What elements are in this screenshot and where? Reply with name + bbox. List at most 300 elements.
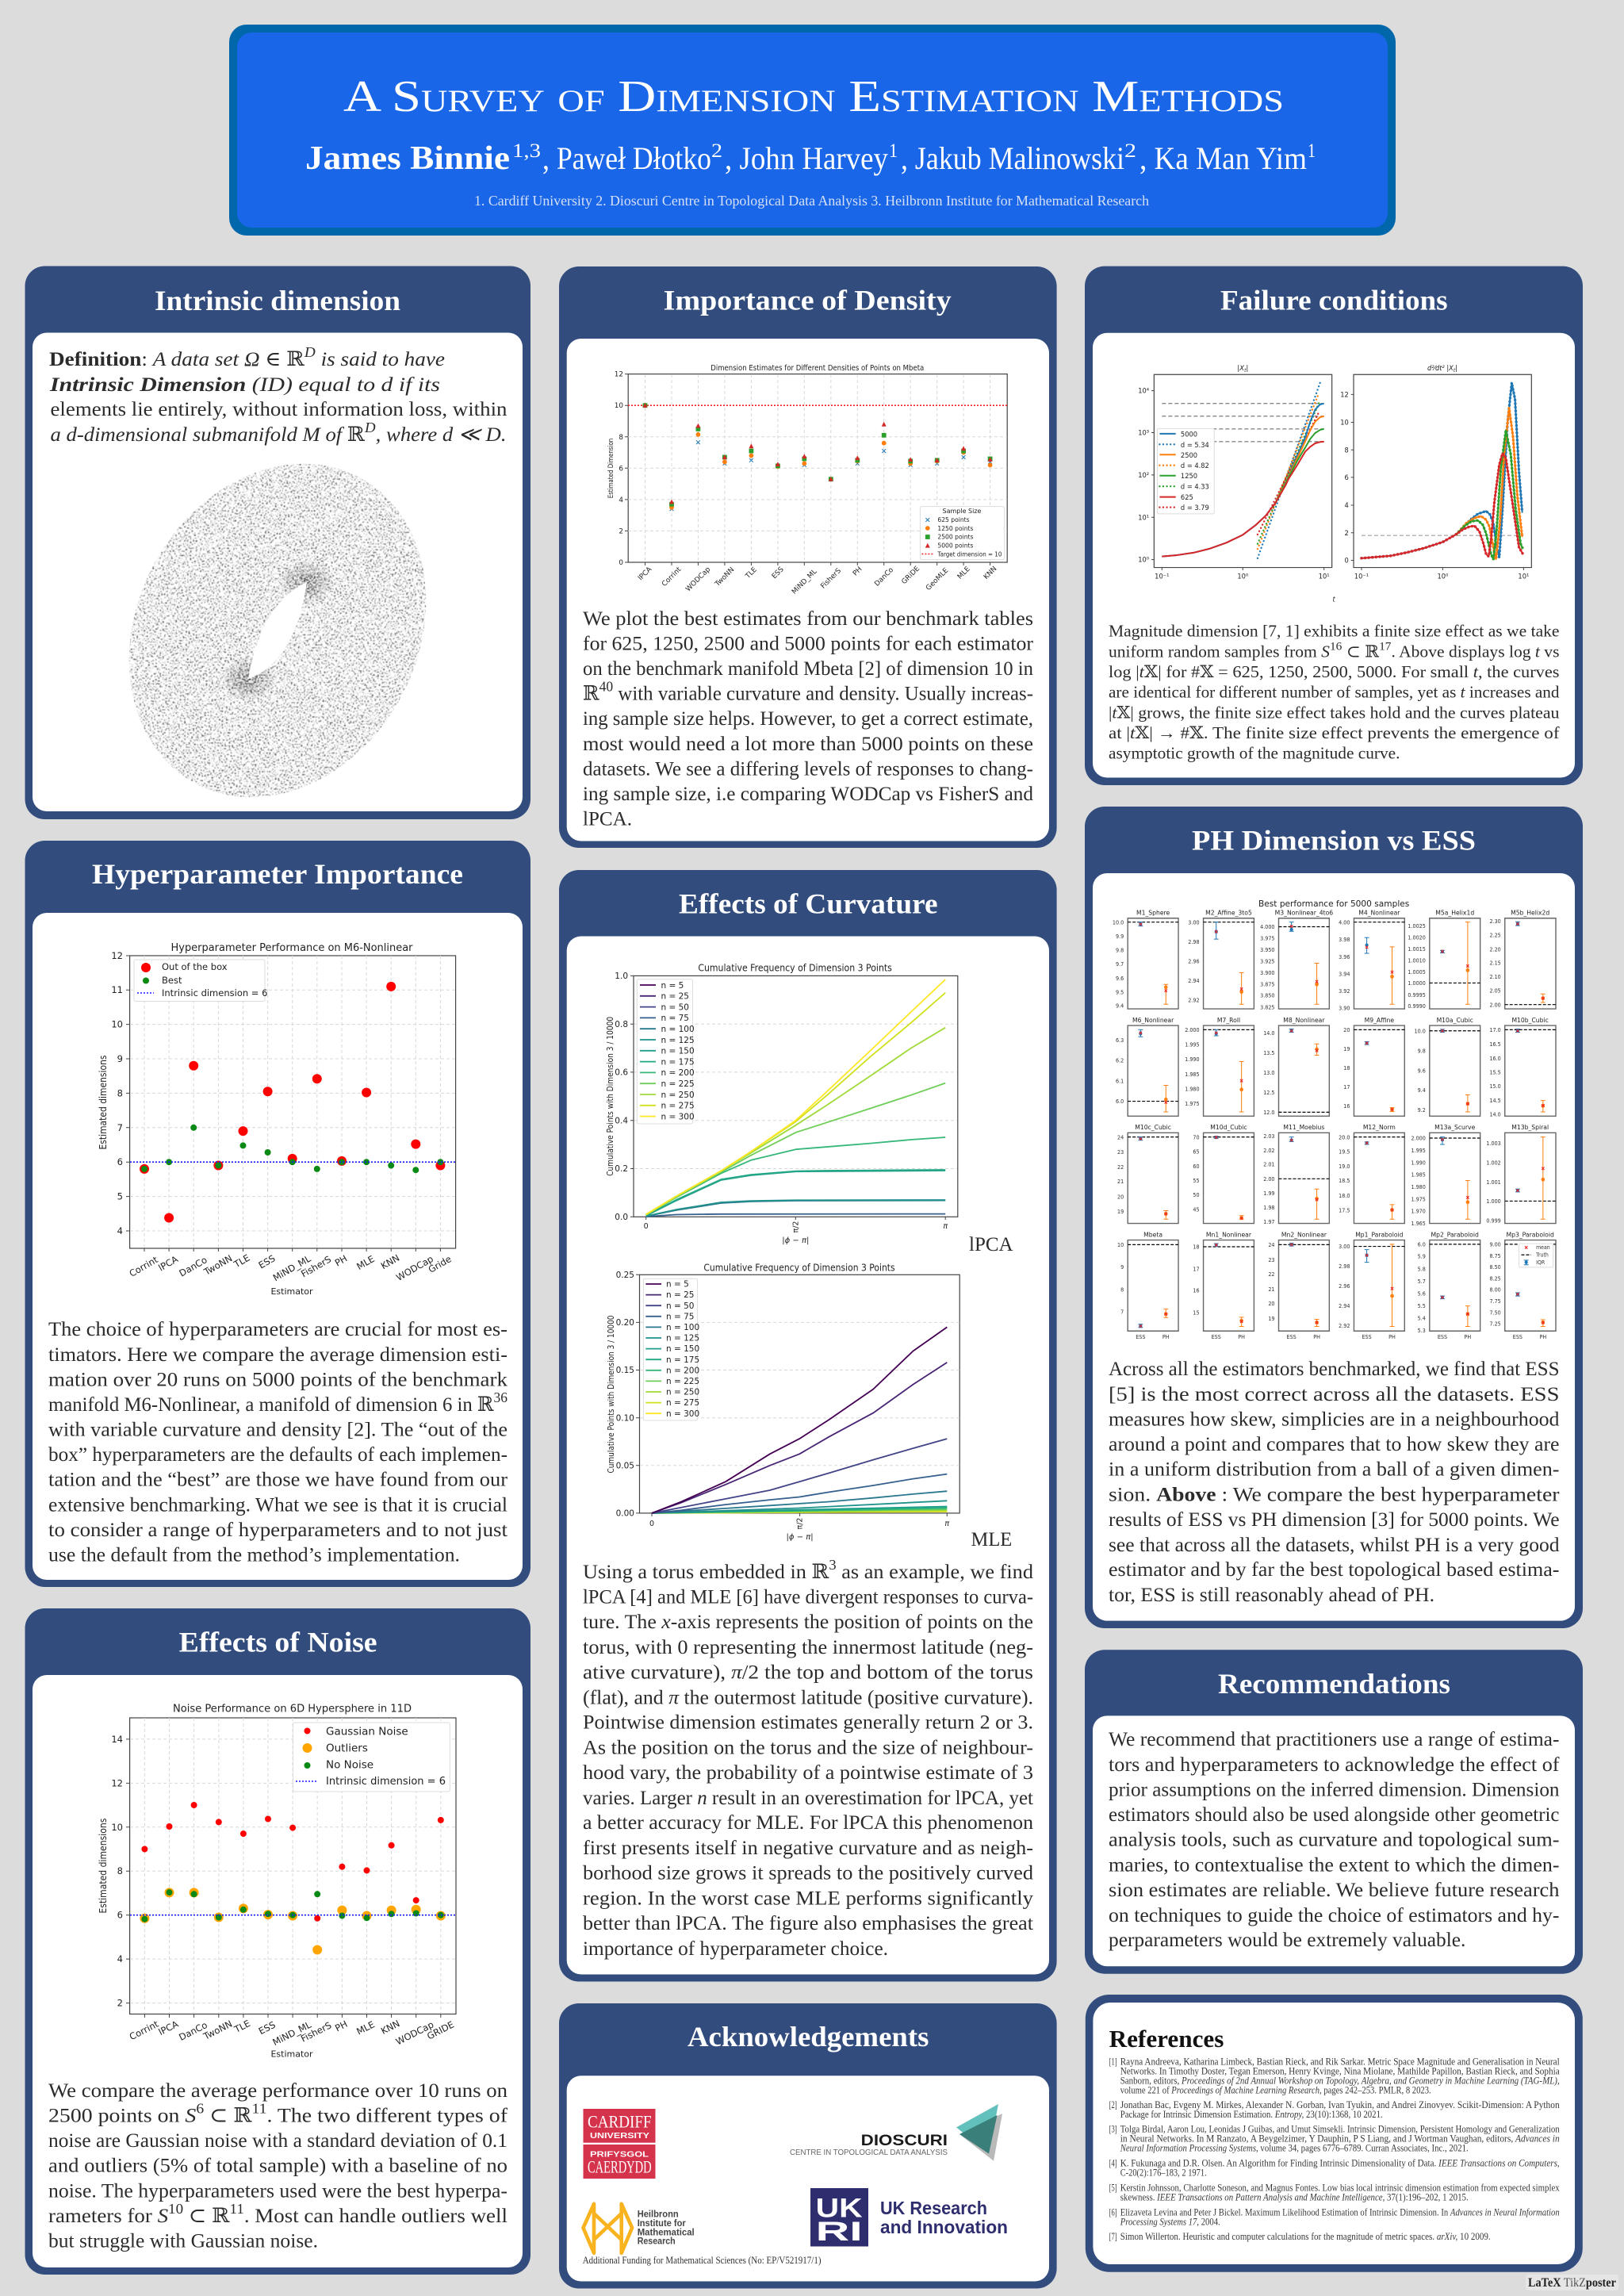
scatter chart: densities on Mbeta: WODCap bbox=[684, 565, 713, 593]
reference list: Kerstin Johnsson, Charlotte Soneson, and Magnus Fontes. Low bias local intrinsic dimension estimation from expected simplex bbox=[1120, 2182, 1560, 2193]
subplot: M13a_Scurve: 1.970 bbox=[1411, 1208, 1426, 1215]
line chart: lPCA: 0.8 bbox=[615, 1020, 628, 1029]
body text: 11 bbox=[252, 2101, 266, 2117]
header banner bbox=[229, 25, 1396, 236]
reference list: K. Fukunaga and D.R. Olsen. An Algorithm for Finding Intrinsic Dimensionality of Data. IEEE Transactions on Computers, bbox=[1120, 2158, 1560, 2169]
subplot: Mp3_Paraboloid: 7.25 bbox=[1489, 1320, 1501, 1328]
subplot: Mbeta bbox=[1117, 1231, 1178, 1340]
subplot: M4_Nonlinear: 4.00 bbox=[1339, 919, 1350, 926]
legend: n = 175 bbox=[661, 1057, 695, 1067]
subplot: M1_Sphere: 9.4 bbox=[1116, 1002, 1124, 1010]
subplot: Mn1_Nonlinear: 17 bbox=[1193, 1266, 1200, 1272]
chart: second derivative of magnitude: d²⁄dt² |X bbox=[1427, 364, 1454, 372]
line chart: lPCA: π bbox=[943, 1222, 948, 1231]
small multiples chart bbox=[1113, 900, 1556, 1340]
subplot: M5b_Helix2d: 2.20 bbox=[1489, 946, 1501, 953]
line chart: lPCA: 0.2 bbox=[615, 1164, 628, 1174]
logo: UK Research and Innovation: UK bbox=[816, 2194, 863, 2224]
subplot: M7_Roll: 2.000 bbox=[1185, 1027, 1200, 1033]
subplot: M10d_Cubic: 45 bbox=[1193, 1206, 1200, 1213]
body text: around a point and compares that to how skew they are bbox=[1109, 1432, 1559, 1455]
chart: magnitude function: | bbox=[1246, 365, 1248, 373]
subplot: Mp2_Paraboloid: 5.7 bbox=[1418, 1278, 1426, 1285]
line chart: lPCA: 1.0 bbox=[615, 972, 628, 981]
reference list: [4] bbox=[1109, 2158, 1117, 2169]
subplot: Mp2_Paraboloid: 5.3 bbox=[1418, 1328, 1426, 1334]
line chart: MLE: 0.10 bbox=[616, 1413, 634, 1423]
reference list: volume 221 of Proceedings of Machine Learning Research, pages 242–253. PMLR, 8 2023. bbox=[1120, 2084, 1431, 2095]
subplot: M10a_Cubic bbox=[1415, 1017, 1480, 1116]
subplot: Mn1_Nonlinear: PH bbox=[1238, 1334, 1245, 1340]
reference list: Elizaveta Levina and Peter J Bickel. Maximum Likelihood Estimation of Intrinsic Dimension. In Advances in Neural Information bbox=[1120, 2206, 1560, 2217]
reference list bbox=[1109, 2056, 1560, 2242]
reference list: [3] bbox=[1109, 2124, 1117, 2135]
subplot: M2_Affine_3to5: 2.96 bbox=[1188, 958, 1200, 965]
legend: n = 50 bbox=[661, 1002, 689, 1012]
legend: n = 125 bbox=[666, 1334, 699, 1343]
heading: Importance of Density bbox=[664, 284, 952, 316]
body text: [5] is the most correct across all the datasets. ESS bbox=[1109, 1382, 1559, 1405]
body text: As the position on the torus and the size of neighbour- bbox=[583, 1736, 1033, 1759]
authors: , Ka Man Yim bbox=[1139, 140, 1307, 176]
scatter chart: densities on Mbeta: ESS bbox=[771, 565, 786, 581]
subplot: Mp3_Paraboloid: 8.00 bbox=[1489, 1286, 1501, 1294]
subplot: M3_Nonlinear_4to6 bbox=[1260, 909, 1333, 1011]
subplot: M3_Nonlinear_4to6: 3.850 bbox=[1260, 993, 1275, 999]
reference list: Sanborn, editors, Proceedings of 2nd Annual Workshop on Topology, Algebra, and Geometry in Machine Learning (TAG-ML), bbox=[1120, 2075, 1560, 2086]
subplot: M3_Nonlinear_4to6: 3.875 bbox=[1260, 981, 1275, 988]
body text: ⊂ ℝ bbox=[204, 2104, 252, 2127]
scatter chart: densities on Mbeta: 4 bbox=[619, 496, 623, 504]
chart: magnitude function: 10⁰ bbox=[1138, 555, 1150, 564]
subplot: M13b_Spiral: 1.003 bbox=[1486, 1140, 1501, 1147]
legend bbox=[920, 507, 1004, 560]
scatter chart: densities on Mbeta: Estimated Dimension bbox=[607, 439, 615, 498]
subplot: M7_Roll: M7_Roll bbox=[1217, 1017, 1240, 1024]
subplot: Mbeta: 10 bbox=[1117, 1242, 1124, 1248]
subplot: M7_Roll: 1.995 bbox=[1185, 1041, 1200, 1048]
subplot: M13a_Scurve: 2.000 bbox=[1411, 1135, 1426, 1142]
subplot: M10a_Cubic: 9.4 bbox=[1418, 1087, 1426, 1094]
legend bbox=[637, 979, 695, 1124]
subplot: M1_Sphere: 9.8 bbox=[1116, 947, 1124, 954]
scatter chart: noise performance: lPCA bbox=[157, 2018, 180, 2037]
scatter chart: M6-Nonlinear: MiND_ML bbox=[271, 1252, 313, 1283]
reference list: in Neural Networks. In M Ranzato, A Beygelzimer, Y Dauphin, P S Liang, and J Wortman Vaughan, editors, Advances in bbox=[1120, 2133, 1560, 2145]
scatter chart: densities on Mbeta: 12 bbox=[615, 371, 623, 379]
subplot: M1_Sphere: 9.7 bbox=[1116, 961, 1124, 968]
body text: . Above displays log bbox=[1392, 642, 1535, 661]
body text: measures how skew, simplicies are in a neighbourhood bbox=[1109, 1407, 1560, 1430]
line chart: MLE: π/2 bbox=[796, 1518, 805, 1529]
funding note: Additional Funding for Mathematical Sciences (No: EP/V521917/1) bbox=[583, 2255, 822, 2266]
subplot: M10c_Cubic: 22 bbox=[1117, 1164, 1124, 1171]
logo: Cardiff University: UNIVERSITY bbox=[590, 2131, 649, 2141]
body text: t vs bbox=[1535, 642, 1559, 661]
subplot: Mp1_Paraboloid: 2.96 bbox=[1339, 1283, 1350, 1290]
subplot: Mn1_Nonlinear: 16 bbox=[1193, 1287, 1200, 1294]
definition text: Intrinsic Dimension (ID) equal to d if its bbox=[49, 373, 440, 396]
subplot: M5b_Helix2d: 2.10 bbox=[1489, 974, 1501, 980]
subplot: Mbeta: Mbeta bbox=[1143, 1231, 1162, 1239]
subplot: M5b_Helix2d: 2.00 bbox=[1489, 1002, 1501, 1008]
subplot: M1_Sphere: M1_Sphere bbox=[1136, 909, 1170, 917]
body text: . The two different types of bbox=[266, 2104, 508, 2127]
torus point cloud bbox=[128, 463, 427, 798]
subplot: M7_Roll: 1.990 bbox=[1185, 1056, 1200, 1063]
subplot: M2_Affine_3to5: 2.94 bbox=[1188, 978, 1200, 984]
chart: magnitude function: 10² bbox=[1138, 471, 1149, 479]
subplot: M13b_Spiral: 1.002 bbox=[1486, 1159, 1501, 1167]
subplot: Mp3_Paraboloid: PH bbox=[1539, 1334, 1546, 1340]
subplot: M2_Affine_3to5: M2_Affine_3to5 bbox=[1205, 909, 1252, 917]
scatter chart: M6-Nonlinear: DanCo bbox=[177, 1254, 209, 1279]
legend: Truth bbox=[1535, 1251, 1549, 1259]
subplot: Mn2_Nonlinear bbox=[1268, 1231, 1329, 1340]
scatter chart: noise performance: MiND_ML bbox=[270, 2019, 313, 2048]
chart: second derivative of magnitude: 12 bbox=[1340, 390, 1349, 398]
subplot: M4_Nonlinear: 3.96 bbox=[1339, 954, 1350, 960]
chart: magnitude function: 10³ bbox=[1138, 428, 1149, 437]
body text bbox=[48, 2079, 508, 2252]
subplot: M10a_Cubic: 10.0 bbox=[1415, 1028, 1426, 1034]
scatter chart: M6-Nonlinear: 8 bbox=[117, 1087, 123, 1098]
chart: second derivative of magnitude: 10 bbox=[1340, 418, 1349, 427]
subplot: M9_Affine: 19 bbox=[1343, 1046, 1350, 1052]
chart: second derivative of magnitude: t bbox=[1454, 368, 1456, 374]
body text: maries, to contextualise the extent to which the dimen- bbox=[1109, 1853, 1559, 1876]
scatter chart: densities on Mbeta: TwoNN bbox=[713, 566, 736, 588]
logo: Heilbronn Institute: Mathematical bbox=[638, 2229, 695, 2238]
authors: 2 bbox=[711, 140, 722, 162]
subplot: Mp3_Paraboloid: 8.75 bbox=[1489, 1253, 1501, 1259]
scatter chart: noise performance: 8 bbox=[117, 1865, 123, 1876]
scatter chart: M6-Nonlinear: TLE bbox=[232, 1252, 251, 1271]
chart: magnitude function: 10¹ bbox=[1319, 572, 1330, 580]
legend: n = 25 bbox=[661, 992, 689, 1002]
subplot: M12_Norm bbox=[1339, 1124, 1404, 1224]
authors: James Binnie bbox=[305, 140, 510, 177]
legend: Intrinsic dimension = 6 bbox=[326, 1775, 446, 1788]
scatter chart: noise performance: Corrint bbox=[128, 2018, 161, 2042]
reference list: [2] bbox=[1109, 2099, 1117, 2110]
reference list: Package for Intrinsic Dimension Estimation. Entropy, 23(10):1368, 10 2021. bbox=[1120, 2109, 1383, 2120]
legend: n = 25 bbox=[666, 1290, 695, 1300]
subplot: M13a_Scurve: 1.985 bbox=[1411, 1171, 1426, 1179]
subplot: M1_Sphere bbox=[1113, 909, 1178, 1010]
legend bbox=[1158, 428, 1214, 514]
body text: ℝ bbox=[583, 682, 599, 705]
legend: mean bbox=[1536, 1244, 1550, 1251]
line chart: MLE: |ϕ − π| bbox=[787, 1533, 814, 1542]
legend: 5000 bbox=[1181, 430, 1197, 438]
subplot: M10c_Cubic: 24 bbox=[1117, 1134, 1124, 1140]
body text: ing sample size, i.e comparing WODCap vs FisherS and bbox=[583, 782, 1033, 805]
subplot: M5a_Helix1d: M5a_Helix1d bbox=[1435, 909, 1474, 917]
legend: Best bbox=[162, 975, 182, 986]
scatter chart: M6-Nonlinear: WODCap bbox=[394, 1253, 435, 1283]
body text: (flat), and π the outermost latitude (positive curvature). bbox=[583, 1685, 1033, 1708]
subplot: Mn2_Nonlinear: 20 bbox=[1268, 1301, 1275, 1307]
body text: We compare the average performance over 10 runs on bbox=[48, 2079, 508, 2102]
body text bbox=[1109, 622, 1560, 763]
scatter chart: densities on Mbeta: 6 bbox=[619, 465, 623, 473]
line chart: lPCA: 0.0 bbox=[615, 1213, 628, 1222]
reference list: skewness. IEEE Transactions on Pattern Analysis and Machine Intelligence, 37(1):196–202, 1 2015. bbox=[1120, 2191, 1469, 2202]
subplot: M5b_Helix2d: 2.25 bbox=[1489, 932, 1501, 938]
subplot: Mp2_Paraboloid: ESS bbox=[1438, 1334, 1447, 1340]
logo: Heilbronn Institute bbox=[584, 2204, 695, 2253]
subplot: M6_Nonlinear: 6.1 bbox=[1116, 1078, 1124, 1084]
subplot: M13b_Spiral: M13b_Spiral bbox=[1511, 1124, 1549, 1131]
body text: estimator and by far the best topological based estima- bbox=[1109, 1558, 1559, 1581]
subplot: M7_Roll: 1.975 bbox=[1185, 1101, 1200, 1107]
subplot: M13a_Scurve: 1.980 bbox=[1411, 1184, 1426, 1190]
subplot: Mp3_Paraboloid: Mp3_Paraboloid bbox=[1507, 1231, 1554, 1239]
scatter chart: noise performance: 14 bbox=[111, 1734, 123, 1745]
definition text: is said to have bbox=[316, 347, 445, 370]
body text: Using a torus embedded in ℝ bbox=[583, 1560, 822, 1583]
line chart: MLE: Cumulative Frequency of Dimension 3 Points bbox=[703, 1262, 895, 1273]
scatter chart: densities on Mbeta: Dimension Estimates for Different Densities of Points on Mbeta bbox=[710, 364, 924, 373]
charts: magnitude curves bbox=[1138, 364, 1531, 604]
subplot: M13a_Scurve: 1.995 bbox=[1411, 1148, 1426, 1154]
subplot: M5a_Helix1d: 0.9990 bbox=[1408, 1003, 1426, 1010]
chart: second derivative of magnitude: 2 bbox=[1345, 529, 1349, 537]
legend: n = 75 bbox=[666, 1312, 695, 1321]
body text: see that across all the datasets, whilst PH is a very good bbox=[1109, 1533, 1560, 1556]
scatter chart: M6-Nonlinear: 7 bbox=[117, 1122, 123, 1133]
subplot: M10d_Cubic: 50 bbox=[1193, 1192, 1200, 1198]
scatter chart: M6-Nonlinear: Hyperparameter Performance on M6-Nonlinear bbox=[171, 941, 413, 954]
body text: 2500 points on S bbox=[48, 2104, 195, 2127]
authors: , Jakub Malinowski bbox=[901, 140, 1124, 176]
heading: Intrinsic dimension bbox=[155, 285, 400, 316]
subplot: Mp2_Paraboloid bbox=[1418, 1231, 1480, 1340]
scatter chart: M6-Nonlinear: PH bbox=[333, 1253, 349, 1268]
subplot: Mbeta: PH bbox=[1162, 1334, 1170, 1340]
chart: second derivative of magnitude: 10⁰ bbox=[1437, 572, 1449, 580]
subplot: Mn1_Nonlinear: 15 bbox=[1193, 1309, 1200, 1316]
body text: ⊂ ℝ bbox=[183, 2204, 230, 2227]
subplot: M8_Nonlinear: M8_Nonlinear bbox=[1283, 1017, 1325, 1024]
subplot: M5a_Helix1d: 1.0025 bbox=[1408, 923, 1426, 930]
scatter chart: densities on Mbeta bbox=[607, 364, 1007, 596]
legend: n = 200 bbox=[666, 1366, 699, 1375]
subplot: M8_Nonlinear: 12.5 bbox=[1263, 1090, 1275, 1096]
subplot: Mp1_Paraboloid: 2.94 bbox=[1339, 1303, 1350, 1309]
title: A Survey of Dimension Estimation Methods bbox=[343, 72, 1284, 121]
scatter chart: densities on Mbeta: MiND_ML bbox=[791, 568, 819, 596]
subplot: M7_Roll: 1.985 bbox=[1185, 1071, 1200, 1078]
body text: a better accuracy for MLE. For lPCA this phenomenon bbox=[583, 1811, 1033, 1834]
logo: UK Research and Innovation: RI bbox=[816, 2217, 863, 2247]
body text bbox=[48, 1317, 508, 1566]
definition text: D bbox=[304, 344, 316, 360]
body text: lPCA [4] and MLE [6] have divergent responses to curva- bbox=[583, 1585, 1033, 1608]
scatter chart: M6-Nonlinear: 9 bbox=[117, 1053, 123, 1064]
panel: effects of curvature bbox=[559, 870, 1057, 1981]
line chart: lPCA: |ϕ − π| bbox=[782, 1236, 809, 1245]
subplot: M11_Moebius bbox=[1263, 1124, 1329, 1225]
reference list: Jonathan Bac, Evgeny M. Mirkes, Alexander N. Gorban, Ivan Tyukin, and Andrei Zinovyev. Scikit-Dimension: A Python bbox=[1120, 2099, 1560, 2110]
body text: rameters for S bbox=[48, 2204, 167, 2227]
subplot: M3_Nonlinear_4to6: 3.900 bbox=[1260, 970, 1275, 976]
subplot: M13a_Scurve: 1.975 bbox=[1411, 1196, 1426, 1203]
subplot: M10b_Cubic: 15.5 bbox=[1489, 1069, 1501, 1076]
line chart: lPCA: Cumulative Points with Dimension 3 / 10000 bbox=[605, 1017, 615, 1176]
reference list: Networks. In Timothy Doster, Tegan Emerson, Henry Kvinge, Nina Miolane, Mathilde Papillon, Bastian Rieck, and Sophia bbox=[1120, 2065, 1560, 2076]
subplot: M12_Norm: 18.5 bbox=[1339, 1178, 1350, 1184]
legend: n = 275 bbox=[661, 1102, 695, 1111]
body text: to consider a range of hyperparameters and to not just bbox=[48, 1518, 508, 1541]
body text: ture. The x-axis represents the position of points on the bbox=[583, 1610, 1033, 1633]
body text: 17 bbox=[1379, 640, 1392, 653]
line chart: lPCA bbox=[605, 962, 958, 1245]
legend: n = 225 bbox=[661, 1079, 695, 1089]
body text: region. In the worst case MLE performs significantly bbox=[583, 1886, 1033, 1910]
legend: n = 275 bbox=[666, 1398, 699, 1408]
panel: hyperparameter importance bbox=[25, 841, 530, 1587]
panel: importance of density bbox=[559, 266, 1057, 848]
subplot: M4_Nonlinear: M4_Nonlinear bbox=[1358, 909, 1400, 917]
legend: 625 bbox=[1181, 493, 1193, 501]
subplot: Mp1_Paraboloid: 3.00 bbox=[1339, 1244, 1350, 1250]
body text: varies. Larger n result in an overestimation for lPCA, yet bbox=[583, 1786, 1033, 1809]
body text: 11 bbox=[230, 2201, 244, 2217]
scatter chart: densities on Mbeta: DanCo bbox=[873, 566, 895, 588]
legend: No Noise bbox=[326, 1758, 373, 1771]
legend: d = 5.34 bbox=[1181, 441, 1209, 449]
body text: on the benchmark manifold Mbeta [2] of dimension 10 in bbox=[583, 657, 1033, 680]
chart: second derivative of magnitude: 10¹ bbox=[1518, 572, 1529, 580]
subplot: M10d_Cubic: 65 bbox=[1193, 1148, 1200, 1156]
authors: , John Harvey bbox=[725, 140, 888, 176]
legend: n = 125 bbox=[661, 1036, 695, 1045]
subplot: M3_Nonlinear_4to6: 3.925 bbox=[1260, 958, 1275, 965]
body text: ative curvature), π/2 the top and bottom of the torus bbox=[583, 1660, 1033, 1683]
body text: timators. Here we compare the average dimension esti- bbox=[48, 1343, 508, 1366]
legend: n = 75 bbox=[661, 1014, 689, 1023]
scatter chart: noise performance: Noise Performance on 6D Hypersphere in 11D bbox=[173, 1702, 412, 1715]
subplot: M10b_Cubic bbox=[1489, 1017, 1556, 1118]
subplot: M10d_Cubic: M10d_Cubic bbox=[1210, 1124, 1247, 1131]
definition text: Definition : A data set Ω ∈ ℝ bbox=[49, 347, 303, 370]
legend: n = 5 bbox=[666, 1280, 689, 1290]
body text: asymptotic growth of the magnitude curve. bbox=[1109, 744, 1400, 763]
body text: noise. The hyperparameters used were the best hyperpa- bbox=[48, 2179, 508, 2202]
subplot: M4_Nonlinear: 3.92 bbox=[1339, 988, 1350, 995]
subplot: Mp3_Paraboloid: 9.00 bbox=[1489, 1241, 1501, 1248]
body text: are identical for different number of samples, yet as t increases and bbox=[1109, 682, 1560, 701]
body text: lPCA. bbox=[583, 807, 632, 830]
scatter chart: M6-Nonlinear: lPCA bbox=[156, 1253, 180, 1274]
chart title: Best performance for 5000 samples bbox=[1258, 900, 1409, 909]
panel: references bbox=[1086, 1995, 1583, 2272]
heading: Acknowledgements bbox=[688, 2021, 929, 2053]
subplot: M13a_Scurve bbox=[1411, 1124, 1480, 1227]
body text: with variable curvature and density [2]. The “out of the bbox=[48, 1418, 508, 1440]
scatter chart: M6-Nonlinear: MLE bbox=[354, 1253, 377, 1272]
body text: with variable curvature and density. Usually increas- bbox=[613, 682, 1033, 705]
scatter chart: M6-Nonlinear: ESS bbox=[257, 1252, 277, 1271]
subplot: M10a_Cubic: 9.6 bbox=[1418, 1068, 1426, 1074]
subplot: M11_Moebius: 1.97 bbox=[1263, 1219, 1275, 1225]
panel: recommendations bbox=[1085, 1650, 1583, 1974]
scatter chart: noise performance: FisherS bbox=[299, 2019, 333, 2045]
subplot: M10c_Cubic: 20 bbox=[1117, 1194, 1124, 1200]
legend: Out of the box bbox=[162, 961, 228, 972]
subplot: M10b_Cubic: 16.0 bbox=[1489, 1056, 1501, 1062]
subplot: M5a_Helix1d: 1.0020 bbox=[1408, 934, 1426, 941]
subplot: Mn1_Nonlinear: ESS bbox=[1212, 1334, 1221, 1340]
subplot: Mp2_Paraboloid: 6.0 bbox=[1418, 1241, 1426, 1248]
subplot: Mbeta: 9 bbox=[1120, 1264, 1124, 1271]
subplot: M10c_Cubic bbox=[1117, 1124, 1178, 1224]
chart: magnitude function: 10⁰ bbox=[1237, 572, 1249, 580]
authors: 1 bbox=[1308, 140, 1316, 162]
body text: sion estimates are reliable. We believe future research bbox=[1109, 1878, 1560, 1901]
line chart: MLE: π bbox=[944, 1520, 949, 1528]
legend: d = 4.33 bbox=[1181, 482, 1209, 491]
legend bbox=[293, 1723, 450, 1792]
subplot: M10c_Cubic: M10c_Cubic bbox=[1135, 1124, 1171, 1131]
body text: tors and hyperparameters to acknowledge the effect of bbox=[1109, 1753, 1560, 1776]
scatter chart: noise performance bbox=[98, 1702, 456, 2060]
subplot: M10d_Cubic: 60 bbox=[1193, 1163, 1200, 1170]
chart: second derivative of magnitude: 10⁻¹ bbox=[1354, 572, 1369, 580]
legend: d = 4.82 bbox=[1181, 462, 1209, 470]
legend: n = 175 bbox=[666, 1355, 699, 1365]
heading: References bbox=[1109, 2025, 1224, 2053]
subplot: M10d_Cubic: 55 bbox=[1193, 1178, 1200, 1184]
body text: We recommend that practitioners use a range of estima- bbox=[1109, 1727, 1559, 1750]
chart: second derivative of magnitude: 0 bbox=[1345, 556, 1349, 565]
definition text: , where d ≪ D. bbox=[376, 423, 506, 446]
subplot: Mp2_Paraboloid: 5.4 bbox=[1418, 1315, 1426, 1321]
scatter chart: densities on Mbeta: 10 bbox=[615, 402, 623, 410]
body text: |t𝕏| grows, the finite size effect takes hold and the curves plateau bbox=[1109, 703, 1560, 722]
legend: d = 3.79 bbox=[1181, 504, 1209, 512]
body text: results of ESS vs PH dimension [3] for 5000 points. We bbox=[1109, 1508, 1559, 1531]
subplot: M11_Moebius: 2.00 bbox=[1263, 1176, 1275, 1182]
label: MLE: MLE bbox=[971, 1527, 1012, 1550]
legend: n = 5 bbox=[661, 981, 684, 991]
subplot: M11_Moebius: M11_Moebius bbox=[1283, 1124, 1324, 1131]
subplot: M12_Norm: 18.0 bbox=[1339, 1193, 1350, 1199]
subplot: M11_Moebius: 2.01 bbox=[1263, 1161, 1275, 1168]
subplot: Mp3_Paraboloid: 8.25 bbox=[1489, 1275, 1501, 1282]
line chart: MLE: 0.25 bbox=[616, 1271, 634, 1280]
legend: n = 300 bbox=[661, 1112, 695, 1121]
legend: 2500 bbox=[1181, 451, 1197, 459]
subplot: M13b_Spiral: 1.001 bbox=[1486, 1179, 1501, 1186]
body text: and outliers (5% of total sample) with a baseline of no bbox=[48, 2154, 508, 2177]
line chart: MLE bbox=[606, 1262, 959, 1542]
legend: 625 points bbox=[937, 516, 970, 523]
subplot: Mp1_Paraboloid: ESS bbox=[1362, 1334, 1372, 1340]
subplot: M10b_Cubic: 14.5 bbox=[1489, 1098, 1501, 1104]
logo: Cardiff University: CARDIFF bbox=[588, 2111, 652, 2131]
subplot: M5a_Helix1d bbox=[1408, 909, 1480, 1010]
subplot: M11_Moebius: 1.99 bbox=[1263, 1190, 1275, 1197]
subplot: M5a_Helix1d: 0.9995 bbox=[1408, 992, 1426, 999]
subplot: Mp2_Paraboloid: PH bbox=[1465, 1334, 1471, 1340]
subplot: M10d_Cubic bbox=[1193, 1124, 1254, 1224]
subplot: M8_Nonlinear: 14.0 bbox=[1263, 1030, 1275, 1037]
subplot: M10b_Cubic: 15.0 bbox=[1489, 1083, 1501, 1090]
scatter chart: M6-Nonlinear: KNN bbox=[379, 1252, 401, 1271]
